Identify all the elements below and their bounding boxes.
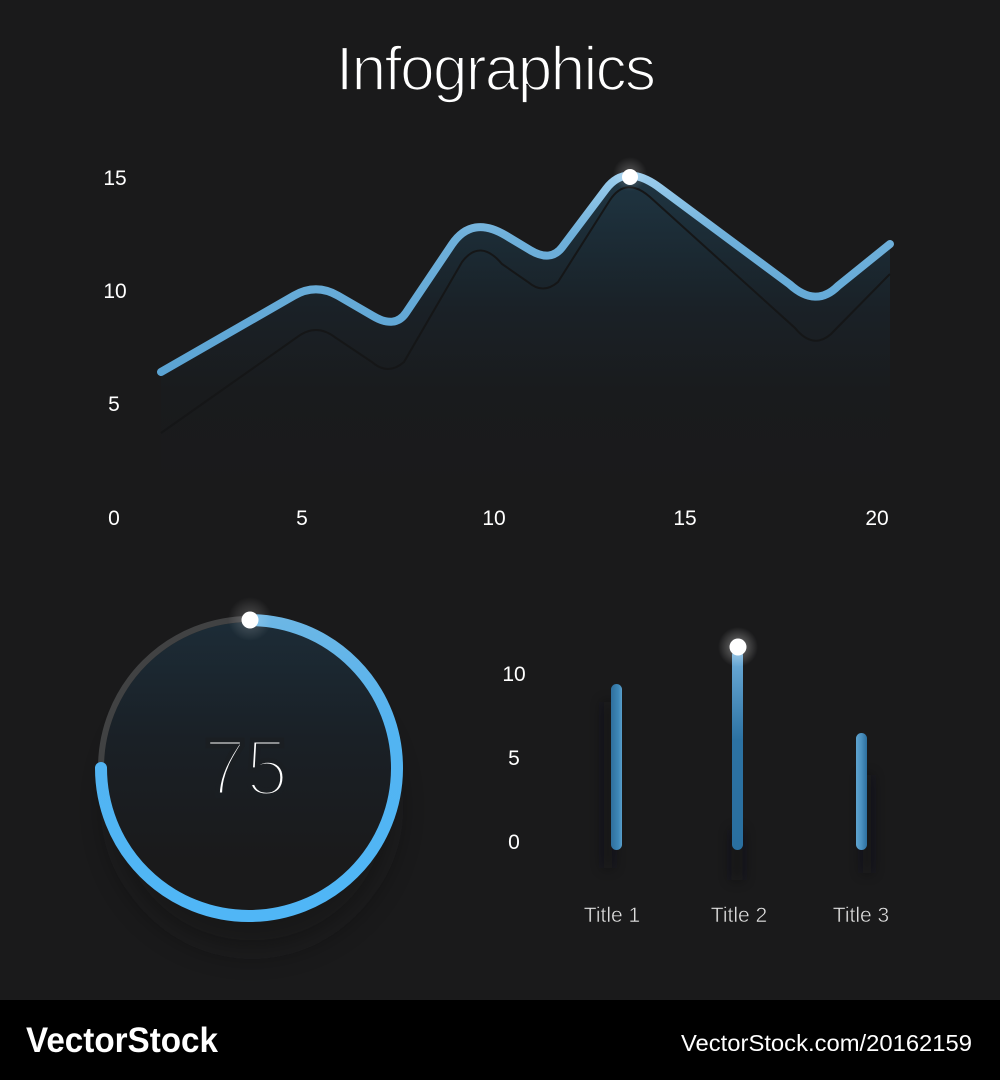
y axis labels: 15	[103, 167, 127, 190]
bar labels: Title 3	[833, 904, 889, 927]
bar chart panel	[502, 627, 889, 927]
bar labels	[584, 904, 889, 927]
footer url: VectorStock.com/20162159	[681, 1030, 972, 1056]
y axis labels: 5	[508, 747, 520, 770]
shadow line	[161, 187, 890, 433]
bar: title 3	[856, 733, 867, 850]
x axis labels	[108, 507, 889, 530]
x axis labels: 0	[108, 507, 120, 530]
x axis labels: 20	[865, 507, 889, 530]
y axis labels: 10	[502, 663, 526, 686]
x axis labels: 10	[482, 507, 506, 530]
gauge drop shadow	[110, 666, 394, 950]
gauge marker glow	[228, 597, 272, 641]
gauge panel	[101, 597, 398, 950]
y axis labels: 5	[108, 393, 120, 416]
area fill under line	[161, 176, 890, 490]
bar: title 1	[611, 684, 622, 850]
marker glow	[613, 157, 647, 191]
gauge track arc	[101, 619, 250, 768]
bar labels: Title 2	[711, 904, 767, 927]
bar marker glow	[718, 627, 758, 667]
bar: title 2	[732, 650, 743, 850]
gauge value arc	[101, 620, 397, 916]
footer logo: VectorStock	[26, 1021, 219, 1060]
marker dot	[622, 169, 638, 185]
gauge inner gradient	[104, 622, 396, 914]
y axis labels	[502, 663, 526, 854]
gauge value: 75	[204, 723, 288, 812]
line chart panel	[103, 157, 890, 530]
gauge background disc	[102, 620, 398, 916]
x axis labels: 5	[296, 507, 308, 530]
bar 2 shadow	[731, 830, 743, 880]
title: Infographics	[336, 35, 656, 104]
x axis labels: 15	[673, 507, 697, 530]
y axis labels: 10	[103, 280, 127, 303]
gauge marker	[242, 612, 258, 628]
footer background	[0, 1000, 1000, 1080]
bar 3 shadow	[862, 775, 872, 873]
bar marker	[730, 638, 746, 656]
bar 1 shadow	[603, 702, 613, 868]
data line	[161, 176, 890, 372]
bar labels: Title 1	[584, 904, 640, 927]
y axis labels: 0	[508, 831, 520, 854]
y axis labels	[103, 167, 127, 416]
footer band	[0, 1000, 1000, 1080]
